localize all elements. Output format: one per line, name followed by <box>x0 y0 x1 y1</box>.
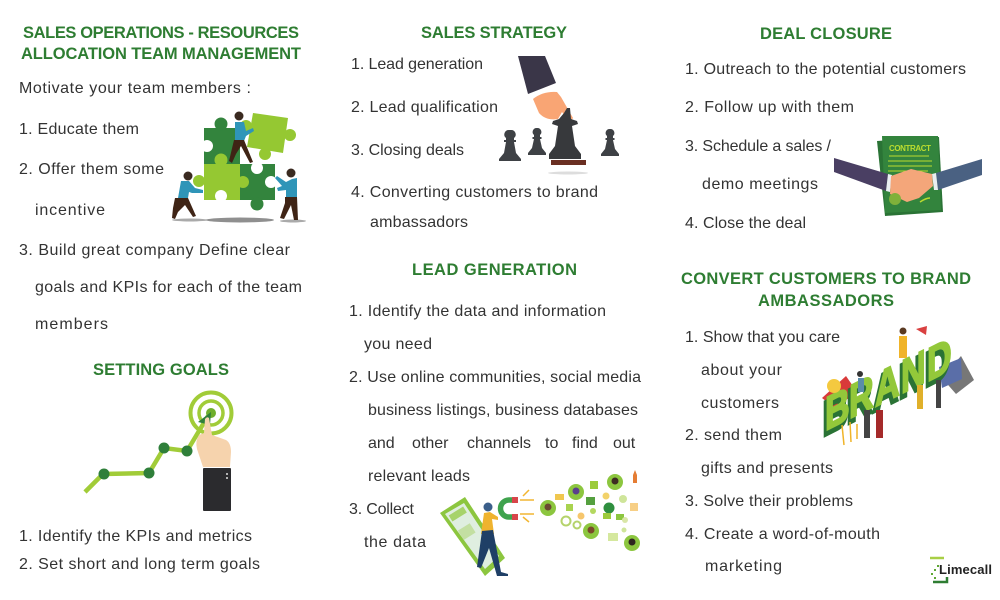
text block: convert list: 1. Show that you care <box>685 329 840 346</box>
pawn <box>528 128 546 155</box>
text block: goals list: 2. Set short and long term goals <box>19 556 260 573</box>
pawn <box>601 129 619 156</box>
text block: motivate list <box>19 80 302 333</box>
text block: motivate list: 1. Educate them <box>19 121 139 138</box>
small icons <box>555 470 638 541</box>
icon: hand moving chess king <box>499 56 619 174</box>
text block: motivate list: Motivate your team members : <box>19 80 251 97</box>
text block: convert list: 4. Create a word-of-mouth <box>685 526 880 543</box>
text block: strategy list: 4. Converting customers to brand <box>351 184 598 201</box>
text block: convert list: marketing <box>705 558 782 575</box>
pawn <box>499 130 521 161</box>
panel: setting goals <box>19 361 260 573</box>
brand word: shadow layer: R <box>847 370 872 435</box>
panel: sales strategy <box>351 24 619 231</box>
heading: sales operations <box>21 24 301 63</box>
brand word: shadow layer <box>823 333 950 447</box>
avatars <box>540 474 640 551</box>
hands <box>890 169 933 202</box>
text block: lead generation list: 3. Collect <box>349 501 415 518</box>
person <box>477 502 508 576</box>
brand word: top layer: B <box>825 377 850 442</box>
text block: goals list <box>19 528 260 573</box>
cuffs <box>886 173 938 192</box>
brand word: top layer: D <box>927 328 952 393</box>
icon: puzzle team <box>172 112 306 222</box>
text block: convert list: 2. send them <box>685 427 782 444</box>
text block: convert list: 3. Solve their problems <box>685 493 853 510</box>
panel: convert customers <box>681 270 974 575</box>
text block: lead generation list: relevant leads <box>368 468 470 485</box>
text block: deal closure list <box>685 61 966 232</box>
text block: lead generation list: channels <box>467 435 531 452</box>
text block: deal closure list: 1. Outreach to the potential customers <box>685 61 966 78</box>
text block: lead generation list: to <box>545 435 558 452</box>
right arm <box>936 159 982 190</box>
logo: Limecall <box>930 558 992 582</box>
text block: deal closure list: 2. Follow up with them <box>685 99 854 116</box>
text block: motivate list: incentive <box>35 202 105 219</box>
left arm <box>834 158 888 191</box>
text block: strategy list: 2. Lead qualification <box>351 99 498 116</box>
text block: lead generation list: 1. Identify the data and information <box>349 303 606 320</box>
text block: strategy list: 3. Closing deals <box>351 142 464 159</box>
icon: brand letters with people <box>822 326 974 447</box>
panel: lead generation <box>349 261 641 576</box>
brand word: top layer: N <box>901 340 926 405</box>
text block: motivate list: 3. Build great company Define clear <box>19 242 291 259</box>
text block: lead generation list: other <box>412 435 449 452</box>
text block: lead generation list: you need <box>364 336 432 353</box>
brand word: top layer: A <box>875 353 900 418</box>
text block: lead generation list: out <box>613 435 636 452</box>
person: left <box>172 172 203 219</box>
heading: setting goals: SETTING GOALS <box>93 361 229 379</box>
text block: motivate list: 2. Offer them some <box>19 161 164 178</box>
text block: strategy list <box>351 56 598 231</box>
text block: lead generation list: find <box>572 435 598 452</box>
heading: sales operations: SALES OPERATIONS - RESOURCES <box>23 24 299 42</box>
panel: sales operations <box>19 24 306 333</box>
heading: convert customers <box>681 270 971 310</box>
icon: magnet attracting leads <box>440 470 640 576</box>
text block: convert list: about your <box>701 362 783 379</box>
brand word: top layer <box>825 328 952 442</box>
icon: growth chart with target <box>85 392 232 511</box>
heading: deal closure: DEAL CLOSURE <box>760 25 892 43</box>
logo: Limecall: Limecall <box>939 562 992 577</box>
text block: goals list: 1. Identify the KPIs and metrics <box>19 528 252 545</box>
text block: motivate list: members <box>35 316 108 333</box>
heading: convert customers: CONVERT CUSTOMERS TO BRAND <box>681 270 971 288</box>
heading: lead generation: LEAD GENERATION <box>412 261 577 279</box>
text block: lead generation list: and <box>368 435 395 452</box>
contract label: CONTRACT <box>889 144 931 153</box>
text block: lead generation list: the data <box>364 534 426 551</box>
text block: strategy list: ambassadors <box>370 214 468 231</box>
text block: motivate list: goals and KPIs for each of the team <box>35 279 302 296</box>
brand word: shadow layer: B <box>823 382 848 447</box>
person: right <box>275 168 298 220</box>
magnet <box>500 500 516 517</box>
text block: lead generation list: business listings, business databases <box>368 402 638 419</box>
brand word: shadow layer: N <box>899 345 924 410</box>
panel: deal closure <box>685 25 982 232</box>
text block: deal closure list: 4. Close the deal <box>685 215 806 232</box>
heading: sales strategy: SALES STRATEGY <box>421 24 567 42</box>
icon: contract handshake <box>834 136 982 216</box>
person: top <box>229 112 254 163</box>
text block: deal closure list: demo meetings <box>702 176 818 193</box>
text block: convert list <box>685 329 880 575</box>
brand word: top layer: R <box>849 365 874 430</box>
brand word: shadow layer: A <box>873 358 898 423</box>
text block: deal closure list: 3. Schedule a sales / <box>685 138 832 155</box>
text block: lead generation list <box>349 303 641 551</box>
brand word: shadow layer: D <box>925 333 950 398</box>
heading: convert customers: AMBASSADORS <box>758 292 894 310</box>
text block: lead generation list: 2. Use online communities, social media <box>349 369 641 386</box>
heading: sales operations: ALLOCATION TEAM MANAGEMENT <box>21 45 301 63</box>
text block: convert list: gifts and presents <box>701 460 833 477</box>
text block: strategy list: 1. Lead generation <box>351 56 483 73</box>
text block: convert list: customers <box>701 395 779 412</box>
